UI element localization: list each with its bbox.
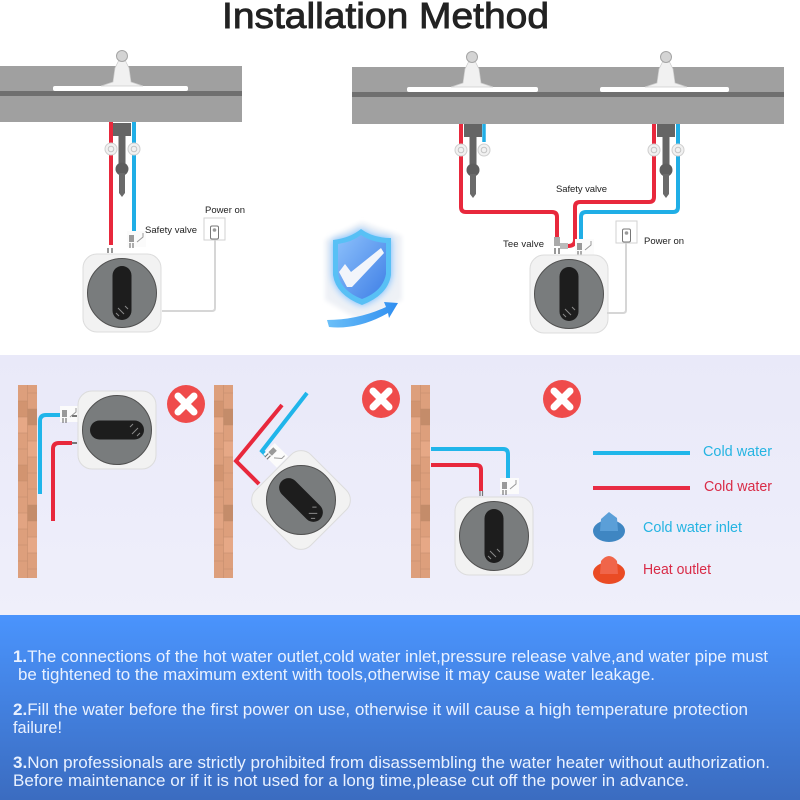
diagram: single bathroom installation — [0, 50, 245, 332]
note 3 — [13, 753, 770, 790]
panel: notes — [0, 615, 800, 800]
diagram: single bathroom installation: Power on — [205, 205, 245, 216]
legend: red line — [593, 479, 772, 495]
legend: cold water inlet: Cold water inlet — [643, 520, 742, 536]
icon: red cross 2 — [362, 380, 400, 418]
note 1 — [13, 647, 768, 684]
wrong example 3: wall-offset heater — [411, 385, 533, 578]
legend: heat outlet: Heat outlet — [643, 562, 711, 578]
panel: incorrect installations and legend — [0, 355, 800, 615]
note 3: 3.Non professionals are strictly prohibited from disassembling the water heater without authorization. — [13, 753, 770, 772]
diagram: two bathroom installation: Power on — [644, 236, 684, 247]
legend: heat outlet — [593, 556, 711, 584]
wrong example 2: tilted heater — [214, 385, 356, 578]
icon: shield with check mark — [325, 222, 402, 327]
note 3: Before maintenance or if it is not used for a long time,please cut off the power in advance. — [13, 771, 689, 790]
note 2: failure! — [13, 718, 62, 737]
legend: blue line: Cold water — [703, 444, 772, 460]
icon: red cross 3 — [543, 380, 581, 418]
diagram: two bathroom installation: Tee valve — [503, 239, 544, 250]
legend: red line: Cold water — [704, 479, 772, 495]
icon: red cross 1 — [167, 385, 205, 423]
diagram: two bathroom installation: Safety valve — [556, 184, 607, 195]
legend: cold water inlet — [593, 512, 742, 542]
diagram: single bathroom installation: Safety valve — [145, 225, 197, 236]
note 2 — [13, 700, 748, 737]
wrong example 1: sideways heater — [18, 385, 156, 578]
note 1: be tightened to the maximum extent with tools,otherwise it may cause water leakage. — [18, 665, 655, 684]
diagram: two bathroom installation — [352, 52, 784, 333]
note 1: 1.The connections of the hot water outlet,cold water inlet,pressure release valve,and water pipe must — [13, 647, 768, 666]
note 2: 2.Fill the water before the first power on use, otherwise it will cause a high temperature protection — [13, 700, 748, 719]
legend: blue line — [593, 444, 772, 460]
